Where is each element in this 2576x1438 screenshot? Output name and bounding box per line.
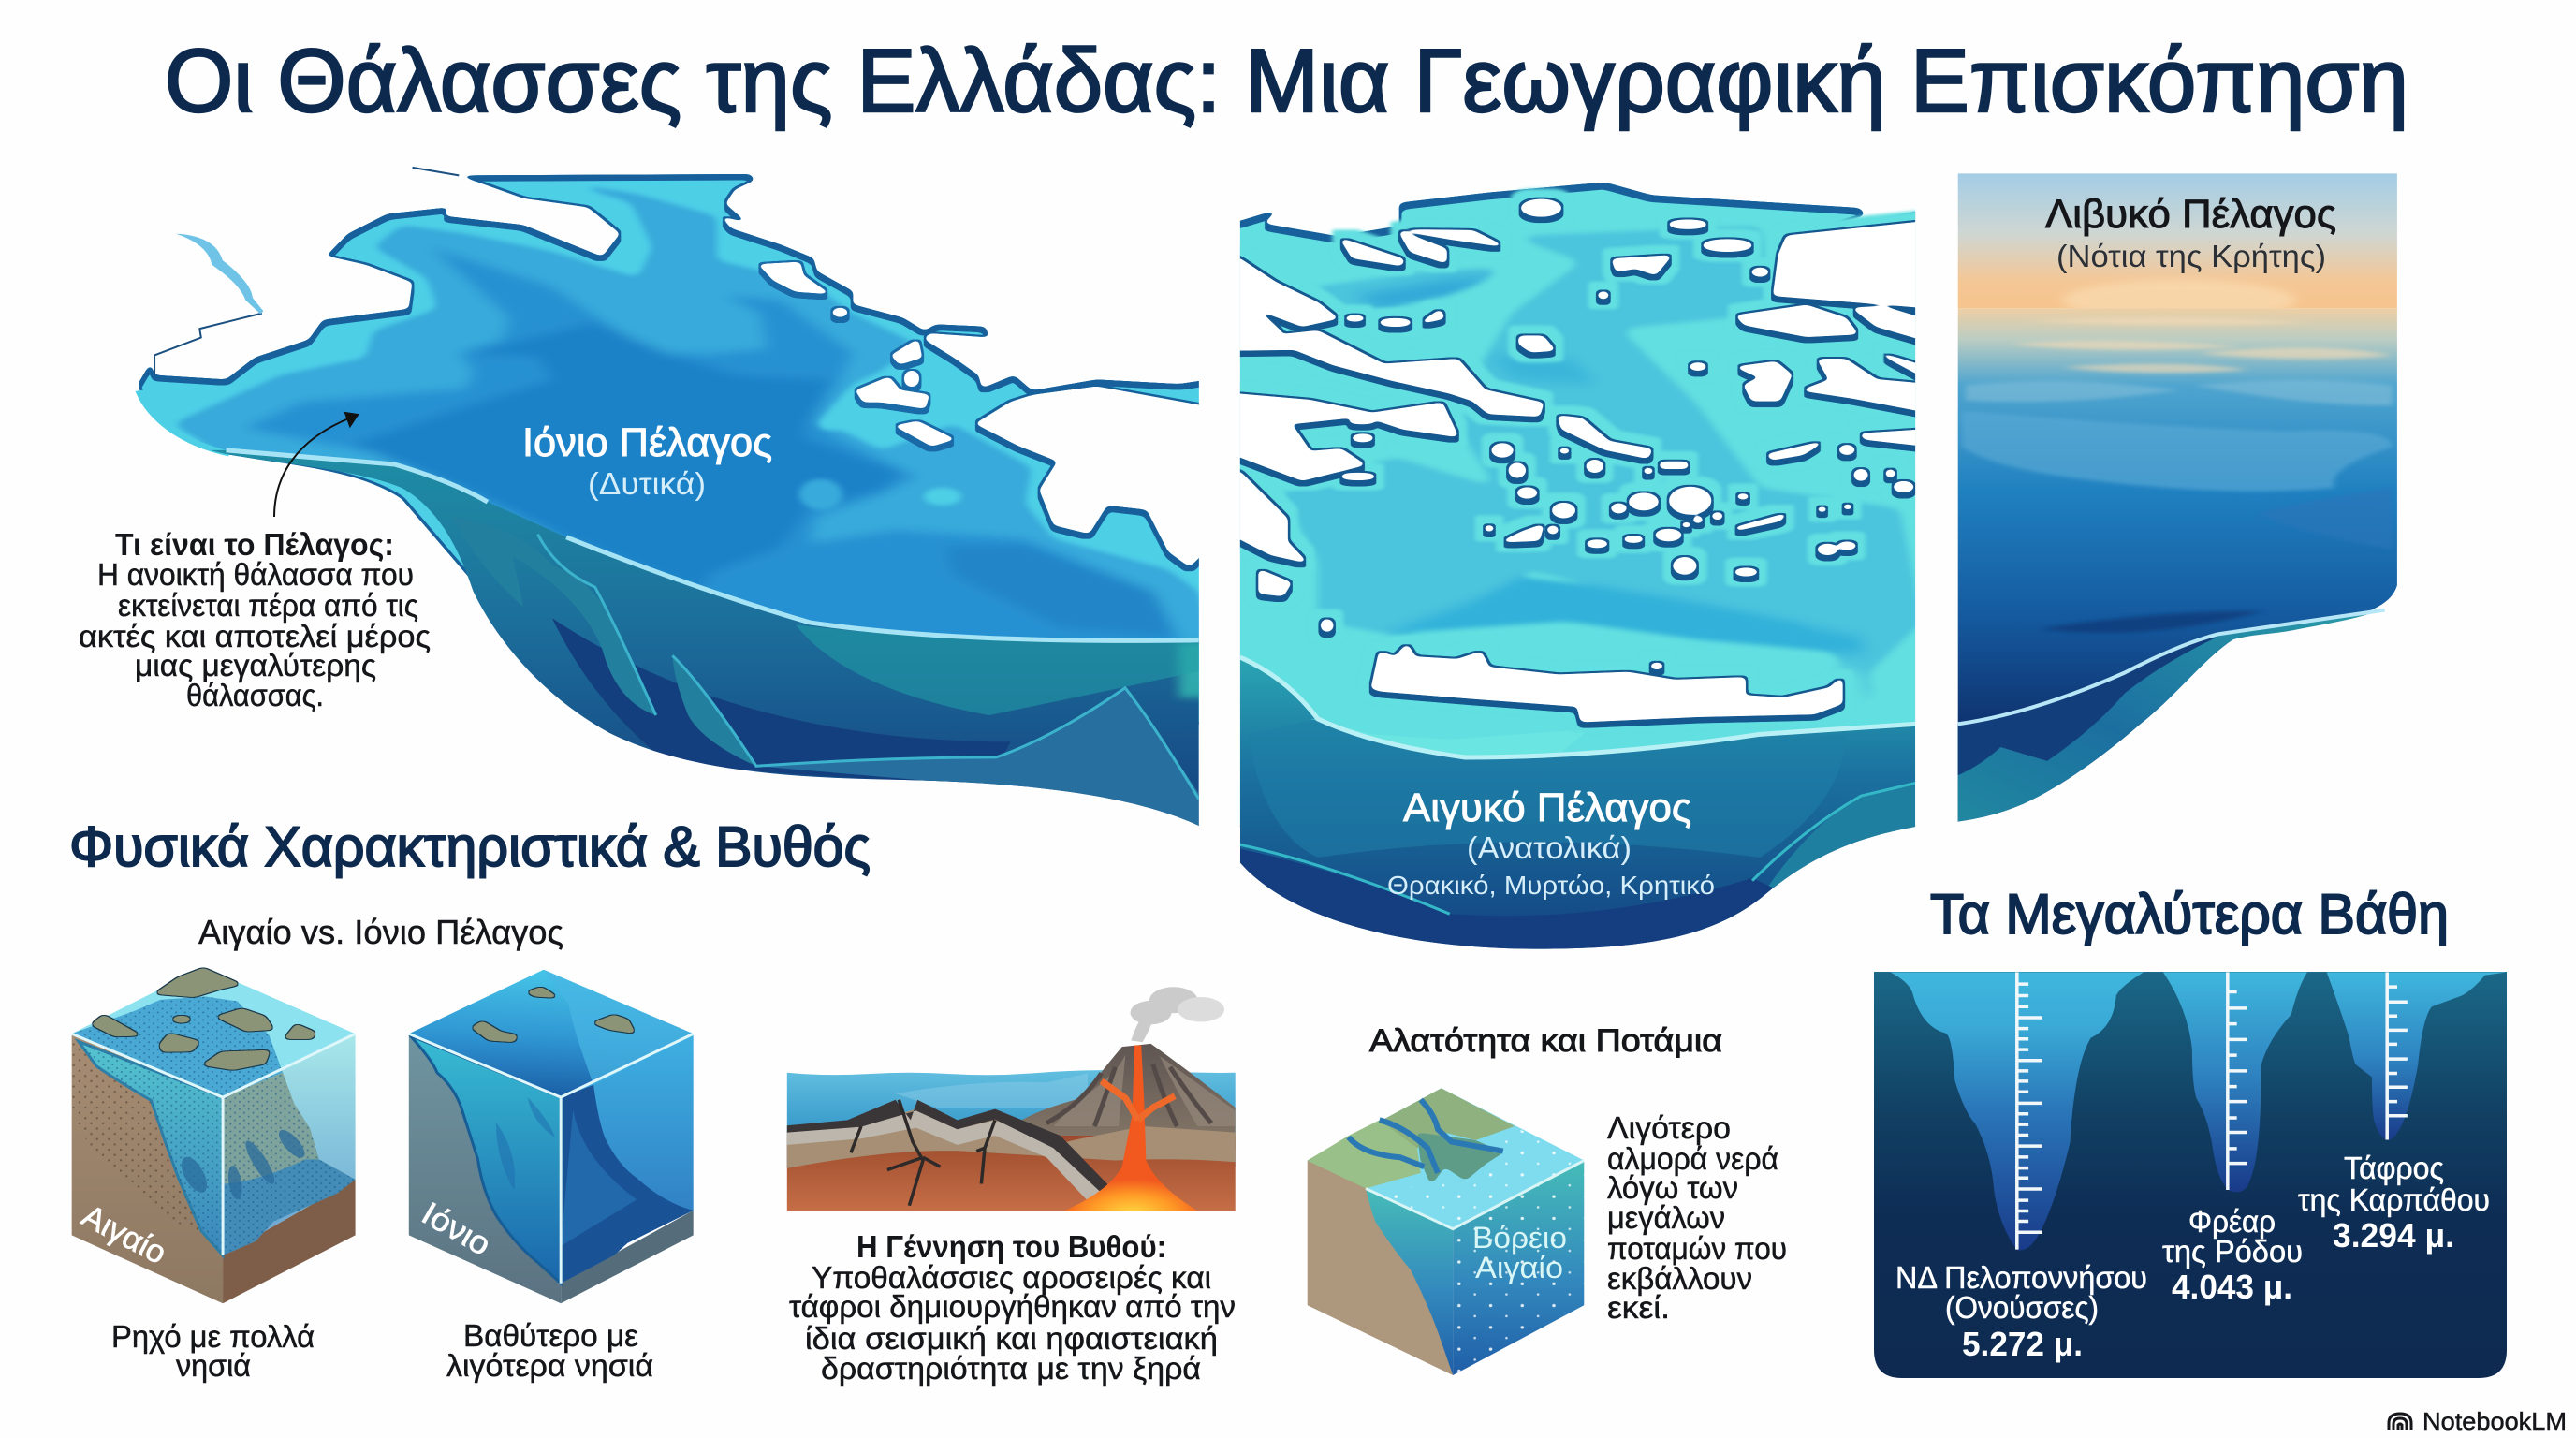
chart background (1874, 972, 2507, 1378)
crust layers (787, 1136, 1236, 1211)
panel: depth chart (1874, 972, 2507, 1378)
label: Ionian Sea: (Δυτικά) (588, 466, 706, 501)
text: birth of the seabed: Υποθαλάσσιες αροσειρές και (812, 1260, 1211, 1295)
callout: what is the open sea: μιας μεγαλύτερης (135, 648, 376, 682)
volcano cone (1012, 1044, 1236, 1148)
label: Karpathos trench depth (2298, 1151, 2490, 1255)
block diagram: North Aegean salinity (1308, 1088, 1584, 1375)
label: Ionian Sea (522, 420, 772, 501)
subheading: Aegean vs Ionian: Αιγαίο vs. Ιόνιο Πέλαγος (198, 913, 564, 951)
seabed cross-section: Ionian (166, 450, 1211, 839)
label: Libyan Sea: (Νότια της Κρήτης) (2056, 239, 2326, 273)
label: North Aegean: Βόρειο (1472, 1221, 1567, 1255)
trenches and depth rulers (1890, 972, 2507, 1251)
text: birth of the seabed (789, 1229, 1236, 1386)
heading: greatest depths: Τα Μεγαλύτερα Βάθη (1930, 883, 2449, 946)
label: SW Peloponnese depth: 5.272 μ. (1962, 1325, 2083, 1363)
callout: what is the open sea: εκτείνεται πέρα από τις (118, 588, 418, 623)
islands: Aegean (1221, 199, 1935, 722)
panel: Ionian Sea map (80, 167, 1199, 826)
callout: what is the open sea: Η ανοικτή θάλασσα που (97, 557, 414, 592)
callout: what is the open sea: ακτές και αποτελεί μέρος (79, 619, 431, 653)
panel: Aegean Sea map (1239, 183, 1915, 949)
map: Ionian water and seabed (135, 167, 1199, 826)
label: Karpathos trench depth: Τάφρος (2344, 1151, 2444, 1185)
text: salinity explanation: λόγω των (1607, 1170, 1738, 1205)
scene: Libyan sky and sea (1958, 173, 2397, 822)
label: Rhodes pit depth: Φρέαρ (2188, 1204, 2276, 1239)
callout: what is the open sea (79, 527, 431, 712)
caption: Ionian block: λιγότερα νησιά (446, 1348, 653, 1383)
callout: what is the open sea: Τι είναι το Πέλαγος: (115, 527, 394, 562)
label: Karpathos trench depth: της Καρπάθου (2298, 1182, 2490, 1217)
label: SW Peloponnese depth: (Ονούσσες) (1945, 1290, 2099, 1325)
heading: physical features: Φυσικά Χαρακτηριστικά & Βυθός (69, 815, 871, 878)
text: salinity explanation: μεγάλων (1607, 1200, 1725, 1235)
illustration: volcano and seabed (787, 987, 1236, 1211)
label: Ionian block: Ιόνιο (416, 1196, 497, 1263)
title: Οι Θάλασσες της Ελλάδας: Μια Γεωγραφική Επισκόπηση (165, 31, 2408, 131)
caption: Aegean block: Ρηχό με πολλά (111, 1319, 315, 1354)
label: Aegean Sea (1387, 785, 1715, 900)
caption: Ionian block (446, 1318, 653, 1383)
land outline: Italy coast (154, 168, 459, 375)
block diagram: Aegean (72, 967, 356, 1303)
text: birth of the seabed: δραστηριότητα με την ξηρά (821, 1351, 1201, 1386)
text: salinity explanation: εκβάλλουν (1607, 1261, 1752, 1296)
label: Ionian Sea: Ιόνιο Πέλαγος (522, 420, 772, 465)
label: Aegean Sea: Αιγυκό Πέλαγος (1403, 785, 1691, 830)
smoke (1131, 987, 1224, 1042)
text: birth of the seabed: τάφροι δημιουργήθηκαν από την (789, 1289, 1236, 1324)
label: Libyan Sea: Λιβυκό Πέλαγος (2045, 192, 2336, 237)
label: Libyan Sea (2045, 192, 2336, 273)
label: North Aegean (1472, 1221, 1567, 1284)
label: Rhodes pit depth (2162, 1204, 2303, 1306)
caption: Ionian block: Βαθύτερο με (463, 1318, 638, 1353)
text: birth of the seabed: Η Γέννηση του Βυθού: (856, 1229, 1166, 1264)
cracks (851, 1100, 995, 1206)
text: salinity explanation (1607, 1110, 1787, 1325)
caption: Aegean block: νησιά (176, 1348, 251, 1383)
text: salinity explanation: Λιγότερο (1607, 1110, 1731, 1145)
label: Aegean block: Αιγαίο (76, 1198, 172, 1271)
text: salinity explanation: εκεί. (1607, 1290, 1670, 1325)
label: Karpathos trench depth: 3.294 μ. (2333, 1216, 2454, 1255)
lava (1063, 1045, 1197, 1211)
callout: what is the open sea: θάλασσας. (186, 678, 324, 712)
text: birth of the seabed: ίδια σεισμική και ηφαιστειακή (805, 1321, 1218, 1356)
map: Aegean water and islands (1239, 183, 1915, 949)
subheading: salinity and rivers: Αλατότητα και Ποτάμια (1369, 1023, 1722, 1059)
label: SW Peloponnese depth (1895, 1260, 2147, 1363)
sea (787, 1070, 1236, 1167)
seabed cross-section: Aegean (1217, 657, 1915, 961)
islands: Ionian (760, 262, 953, 446)
label: Aegean Sea: Θρακικό, Μυρτώο, Κρητικό (1387, 871, 1715, 900)
text: salinity explanation: ποταμών που (1607, 1231, 1787, 1266)
river: Ionian north (176, 234, 263, 315)
block diagram: Ionian (409, 970, 694, 1303)
label: SW Peloponnese depth: ΝΔ Πελοποννήσου (1895, 1260, 2147, 1295)
lower-left rim without shore band (139, 390, 229, 454)
label: Aegean Sea: (Ανατολικά) (1467, 830, 1632, 865)
islands: Ionian block (473, 988, 635, 1042)
panel: Libyan Sea (1958, 173, 2397, 822)
arrow: callout to open sea (274, 413, 358, 517)
icon: NotebookLM (2389, 1414, 2411, 1430)
text: salinity explanation: αλμορά νερά (1607, 1141, 1778, 1176)
label: Rhodes pit depth: της Ρόδου (2162, 1234, 2303, 1269)
logo: NotebookLM: NotebookLM (2422, 1407, 2567, 1435)
islands: Aegean block (92, 968, 315, 1069)
caption: Aegean block (111, 1319, 315, 1383)
label: North Aegean: Αιγαίο (1475, 1251, 1563, 1284)
label: Rhodes pit depth: 4.043 μ. (2172, 1268, 2292, 1306)
